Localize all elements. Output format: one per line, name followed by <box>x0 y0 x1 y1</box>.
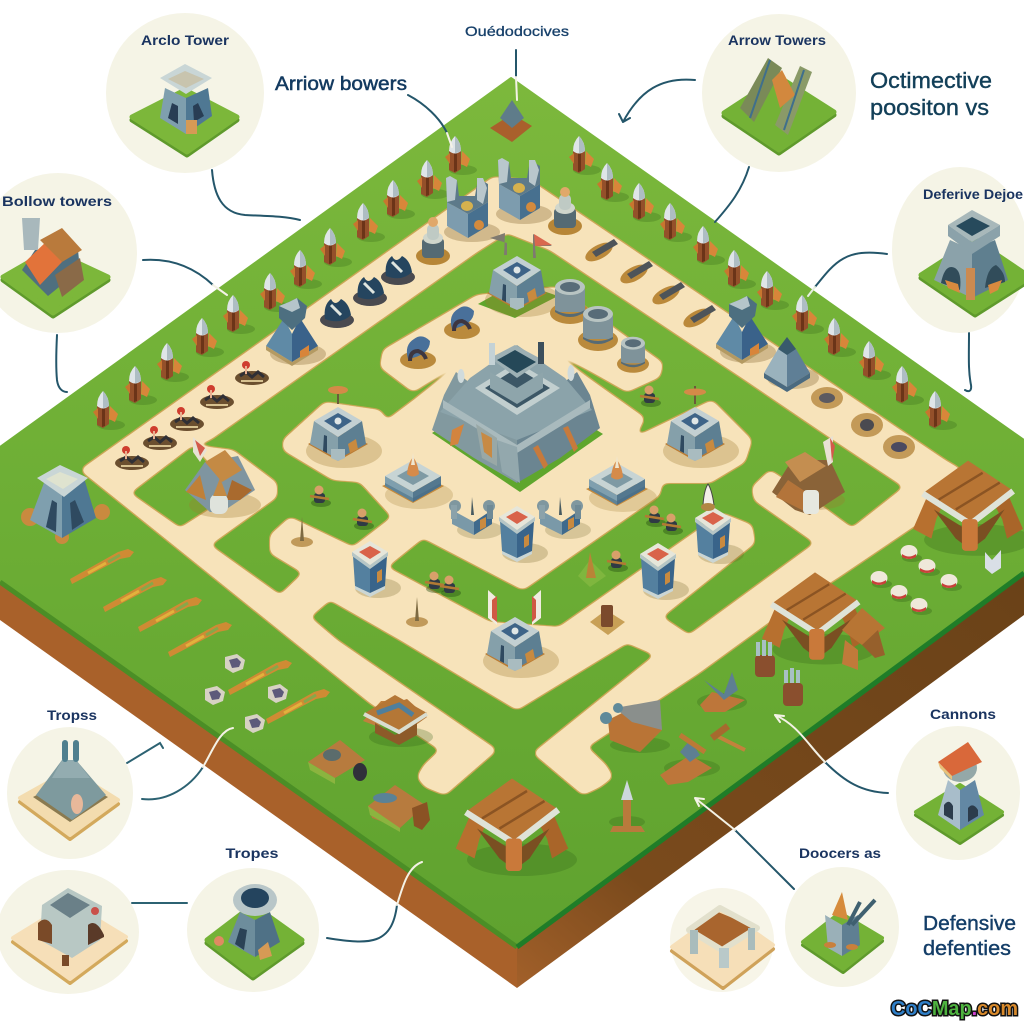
text block: Defensive defenties: defenties <box>923 938 1011 960</box>
panel: stone gate bubble <box>0 870 139 994</box>
bench <box>842 608 885 670</box>
text block: Octimective: Octimective <box>870 68 992 93</box>
red towers <box>352 506 744 600</box>
panel: Arclo Tower <box>106 13 264 173</box>
label: Tropss <box>47 707 97 723</box>
label: Arclo Tower <box>141 32 230 48</box>
label: Deferive Dejoe <box>923 186 1023 202</box>
panel: wooden fort bubble <box>670 888 774 992</box>
panel: Cannons <box>896 706 1020 860</box>
top-left spike row <box>93 136 477 430</box>
label: Ouedodocives: Ouédodocives <box>465 23 569 39</box>
logo: CoCMap.com: CoCMap.com <box>891 998 1018 1020</box>
label: Arrow Towers <box>728 32 826 48</box>
label: Tropes <box>226 845 279 861</box>
hammer <box>712 726 745 750</box>
small tent SE <box>600 700 670 753</box>
spear south <box>609 780 645 832</box>
top catapult <box>490 100 532 142</box>
banner <box>985 550 1001 574</box>
SW sticks <box>70 549 330 724</box>
quivers <box>755 640 803 706</box>
label: Bollow towers <box>2 193 112 209</box>
castle keep <box>432 342 603 492</box>
label: Doocers as <box>799 845 881 861</box>
label: Arriow bowers: Arriow bowers <box>275 73 407 95</box>
south-west tents <box>308 695 433 832</box>
text block: Defensive defenties: Defensive <box>923 913 1016 935</box>
east tent <box>772 436 845 515</box>
flame huts <box>382 453 657 512</box>
soldiers <box>310 386 683 597</box>
text block: Octimective: poositon vs <box>870 95 989 120</box>
small towers <box>449 497 591 539</box>
panel: Tropss <box>7 707 133 859</box>
panel: Deferive Dejoe <box>892 167 1024 333</box>
west tent <box>185 437 261 518</box>
right big tent <box>913 461 1024 556</box>
panel: Bollow towers <box>0 173 137 333</box>
corner stone tower <box>21 465 110 544</box>
south big tent <box>456 778 577 876</box>
connector lines <box>56 50 971 942</box>
cream road network <box>80 177 962 795</box>
spear pads <box>291 517 606 627</box>
top gate <box>478 233 561 318</box>
south gate <box>483 590 559 678</box>
panel: Tropes <box>187 845 319 992</box>
panel: Arrow Towers <box>702 14 856 172</box>
north patch pots <box>550 279 649 373</box>
catapults <box>660 672 747 785</box>
rocks <box>205 654 288 733</box>
lower right tent <box>762 572 876 664</box>
stone huts <box>306 386 739 468</box>
panel: Doocers as <box>785 845 899 987</box>
brick pad <box>590 605 625 635</box>
helmets <box>870 545 962 615</box>
road objects north-east <box>548 187 915 459</box>
white spike <box>701 484 715 511</box>
top-right spike row <box>569 136 957 430</box>
label: Cannons <box>930 706 996 722</box>
road towers north-west <box>115 158 552 470</box>
north patch statues <box>400 306 480 369</box>
